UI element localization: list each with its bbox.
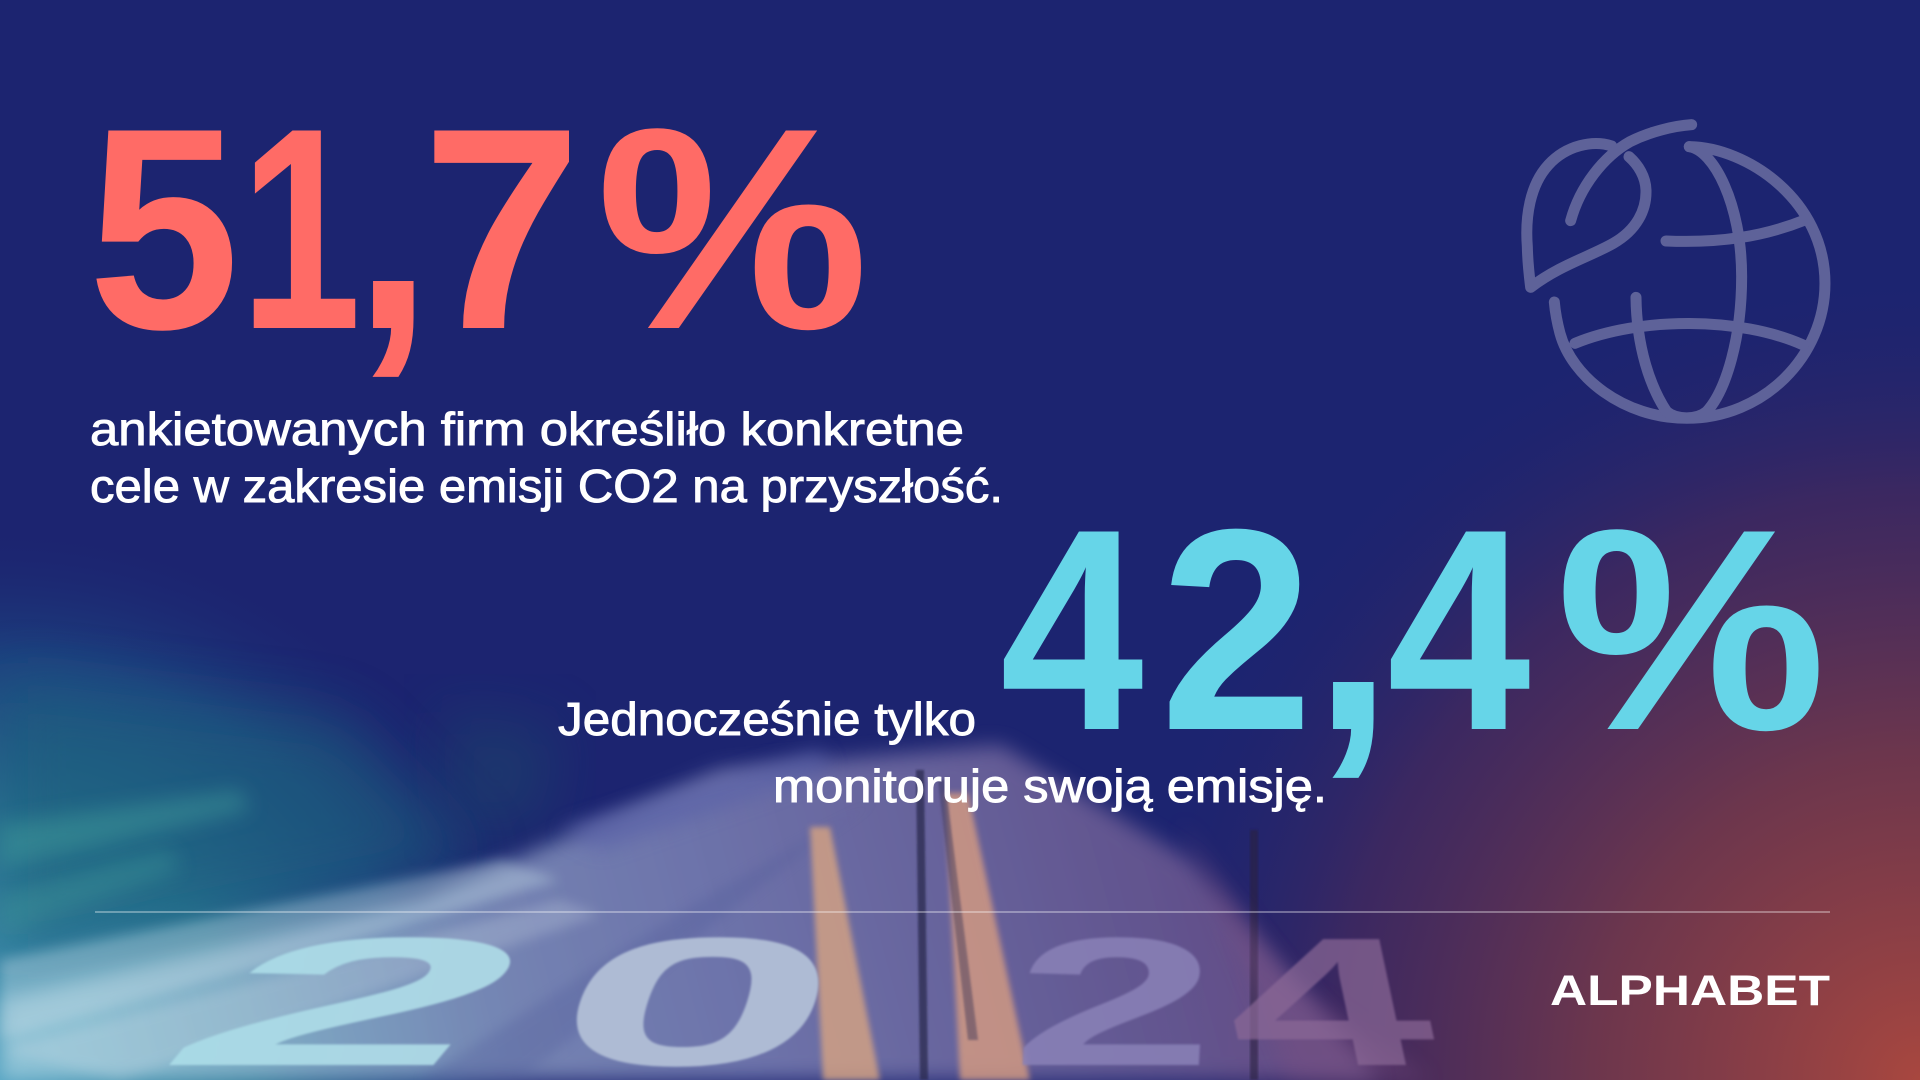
logo: ALPHABET: ALPHABET [1550,967,1830,1015]
description: 51,7%: ankietowanych firm określiło konkretne [90,403,964,455]
big number: 42,4%: % [1556,469,1826,790]
big number: 51,7%: , [353,42,433,395]
big number: 42,4%: 4 [1387,469,1532,790]
big number: 51,7% [88,42,869,395]
description: 51,7%: cele w zakresie emisji CO2 na przyszłość. [90,460,1003,512]
description: 42,4%: monitoruje swoją emisję. [773,760,1327,812]
road marking: 2024 [117,899,1452,1080]
description: 42,4% [558,693,1327,812]
icon: globe with leaf [1527,125,1825,418]
big number: 42,4%: 2 [1160,469,1313,790]
big number: 51,7%: 1 [240,69,361,390]
big number: 42,4%: , [1313,443,1393,796]
big number: 51,7%: % [596,68,869,389]
description: 42,4%: Jednocześnie tylko [558,693,976,745]
description: 51,7% [90,403,1003,512]
big number: 51,7%: 7 [422,68,582,389]
big number: 42,4% [1000,443,1826,796]
big number: 51,7%: 5 [88,70,240,390]
big number: 42,4%: 4 [1000,469,1145,790]
